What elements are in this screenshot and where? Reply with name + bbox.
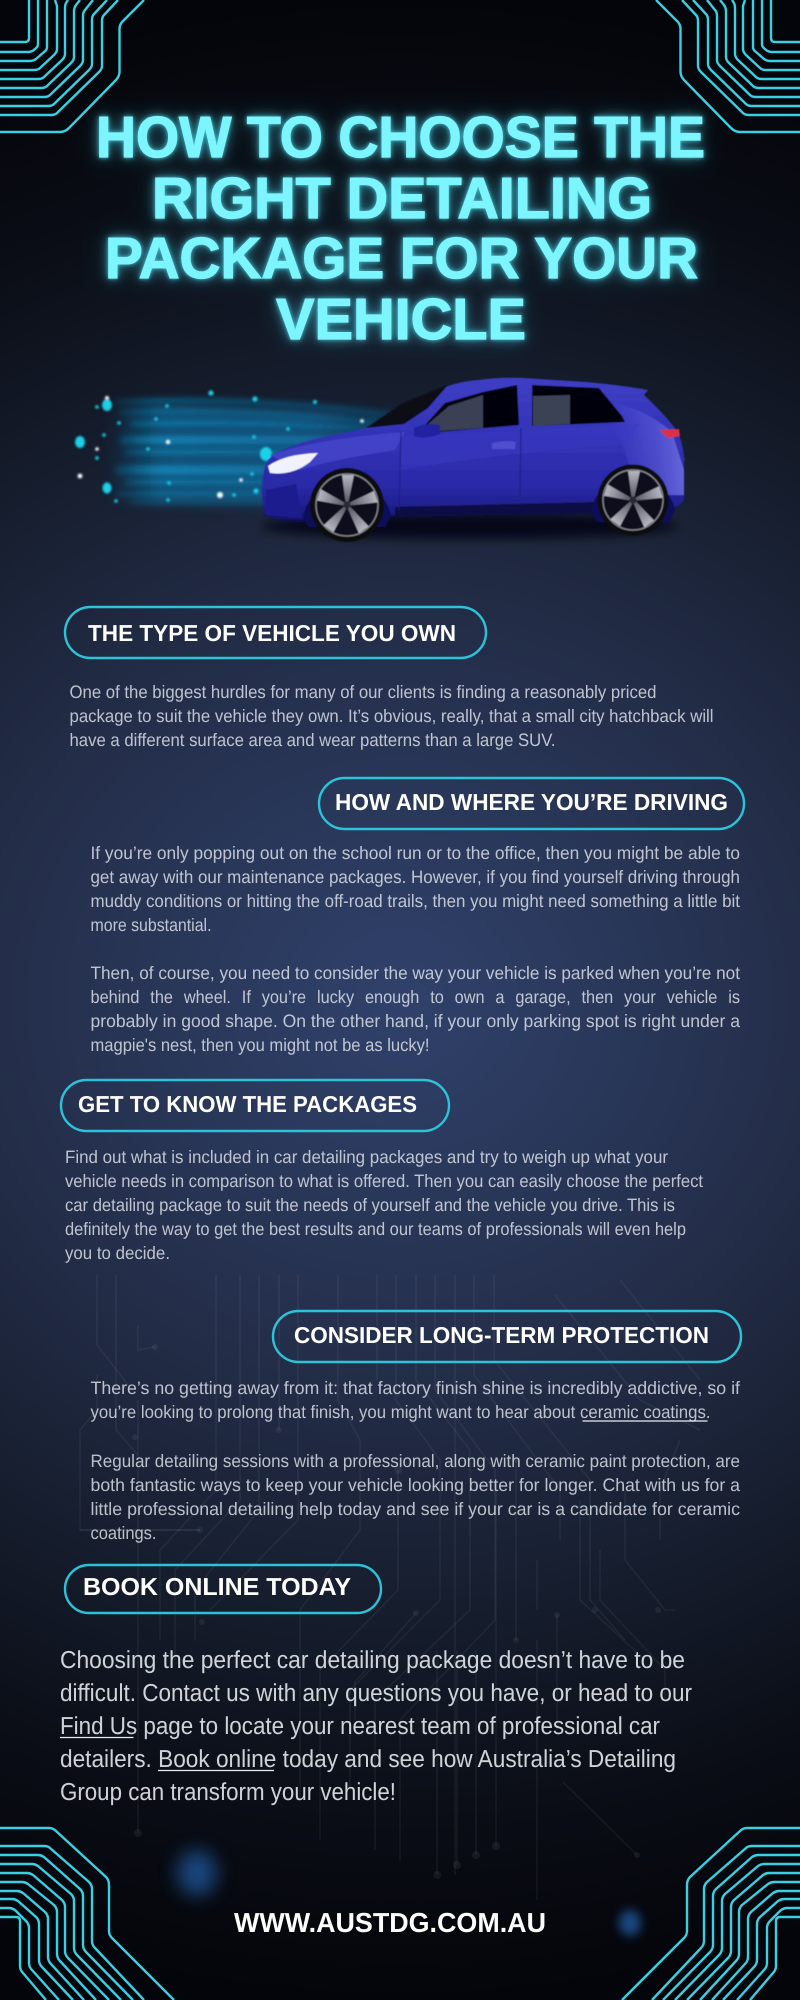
headlight (268, 453, 318, 474)
text block: type of vehicle: have a different surface area and wear patterns than a large SUV. (70, 730, 556, 750)
heading pill: get to know the packages (61, 1080, 449, 1131)
text block: long-term protection: both fantastic ways to keep your vehicle looking better for longer. Chat with us for a (90, 1475, 741, 1495)
text block: how and where you drive: muddy conditions or hitting the off-road trails, then you might need something a little bit (90, 891, 740, 911)
glow: left blue light (177, 1850, 217, 1896)
tail light (659, 429, 680, 438)
mirror and door handle (399, 424, 521, 510)
text block: long-term protection: coatings. (90, 1523, 156, 1543)
text block: get to know the packages: definitely the way to get the best results and our teams of professionals will even help (65, 1219, 686, 1239)
text block: how and where you drive: behind the wheel. If you’re lucky enough to own a garage, then your vehicle is (90, 987, 740, 1007)
heading pill: get to know the packages: GET TO KNOW THE PACKAGES (78, 1091, 417, 1117)
title: RIGHT DETAILING (152, 166, 652, 231)
faint circuit board background (80, 1275, 700, 1900)
text block: how and where you drive: magpie's nest, then you might not be as lucky! (90, 1035, 430, 1055)
heading pill: how and where you're driving: HOW AND WHERE YOU’RE DRIVING (335, 789, 728, 815)
heading pill: book online today (65, 1565, 381, 1613)
text block: how and where you drive: Then, of course, you need to consider the way your vehicle is parked when you’re not (90, 963, 740, 983)
front wheel (303, 468, 391, 542)
closing paragraph: Choosing the perfect car detailing package doesn’t have to be (60, 1647, 685, 1674)
text block: how and where you drive: If you’re only popping out on the school run or to the office, then you might be able to (90, 843, 740, 863)
text block: type of vehicle: One of the biggest hurdles for many of our clients is finding a reasonably priced (70, 682, 656, 702)
heading pill: how and where you're driving (319, 778, 744, 829)
text block: how and where you drive: get away with our maintenance packages. However, if you find yourself driving through (90, 867, 740, 887)
text block: long-term protection: There’s no getting away from it: that factory finish shine is incredibly addictive, so if (90, 1378, 741, 1398)
corner circuit: top right (656, 0, 800, 132)
text block: get to know the packages: you to decide. (65, 1243, 170, 1263)
glow: right blue light (619, 1910, 641, 1936)
car (262, 378, 684, 542)
closing paragraph: detailers. Book online today and see how Australia’s Detailing (60, 1746, 676, 1773)
closing paragraph: Find Us page to locate your nearest team of professional car (60, 1713, 660, 1740)
rear wheel (591, 464, 675, 536)
side windows (425, 385, 625, 432)
title: PACKAGE FOR YOUR (105, 226, 698, 291)
corner circuit: bottom left (0, 1828, 174, 2000)
closing paragraph (60, 1647, 692, 1806)
heading pill: consider long-term protection (273, 1311, 741, 1362)
text block: get to know the packages: Find out what is included in car detailing packages and try to weigh up what your (65, 1147, 668, 1167)
heading pill: book online today: BOOK ONLINE TODAY (83, 1574, 351, 1601)
windscreen (366, 385, 448, 428)
closing paragraph: Group can transform your vehicle! (60, 1779, 396, 1806)
text block: type of vehicle (70, 682, 714, 750)
text block: long-term protection: Regular detailing sessions with a professional, along with ceramic paint protection, are (90, 1451, 740, 1471)
website address: WWW.AUSTDG.COM.AU (234, 1907, 546, 1938)
text block: get to know the packages: car detailing package to suit the needs of yourself and the vehicle you drive. This is (65, 1195, 675, 1215)
text block: how and where you drive: more substantial. (90, 915, 212, 935)
corner circuit: bottom right (622, 1828, 800, 2000)
closing paragraph: difficult. Contact us with any questions you have, or head to our (60, 1680, 692, 1707)
text block: get to know the packages (65, 1147, 703, 1263)
title (96, 105, 705, 352)
title: HOW TO CHOOSE THE (96, 105, 705, 170)
heading pill: the type of vehicle you own (65, 607, 486, 658)
heading pill: consider long-term protection: CONSIDER LONG-TERM PROTECTION (294, 1322, 709, 1348)
text block: long-term protection (90, 1378, 741, 1543)
heading pill: the type of vehicle you own: THE TYPE OF VEHICLE YOU OWN (88, 620, 456, 646)
text block: get to know the packages: vehicle needs in comparison to what is offered. Then you can easily choose the perfect (65, 1171, 703, 1191)
text block: how and where you drive (90, 843, 741, 1055)
text block: long-term protection: little professional detailing help today and see if your car is a candidate for ceramic (90, 1499, 740, 1519)
speed streaks and sparkles behind the car (75, 390, 684, 505)
text block: type of vehicle: package to suit the vehicle they own. It’s obvious, really, that a small city hatchback will (70, 706, 714, 726)
text block: long-term protection: you’re looking to prolong that finish, you might want to hear about ceramic coatings. (90, 1402, 710, 1422)
title: VEHICLE (276, 287, 526, 352)
text block: how and where you drive: probably in good shape. On the other hand, if your only parking spot is right under a (90, 1011, 741, 1031)
corner circuit: top left (0, 0, 144, 132)
